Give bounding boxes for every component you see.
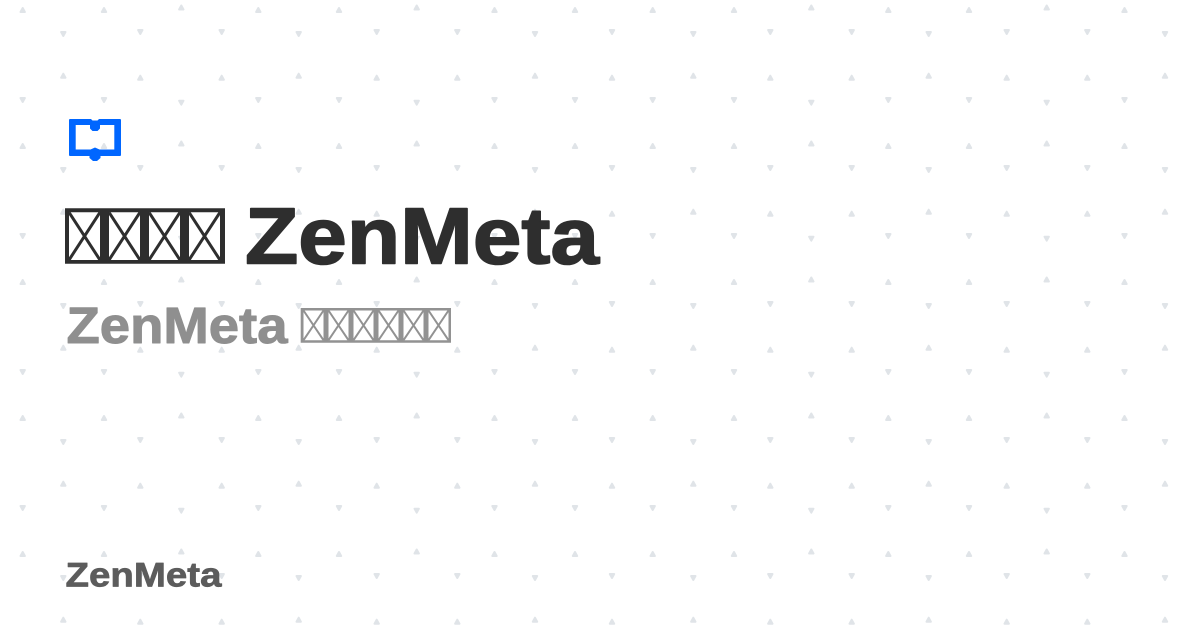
subtitle: brand name: ZenMeta xyxy=(66,297,288,354)
title: missing-glyph boxes xyxy=(65,208,225,264)
footer brand name: ZenMeta xyxy=(66,556,222,594)
subtitle: missing-glyph boxes xyxy=(301,308,451,343)
subtitle xyxy=(66,297,451,354)
icon: blue open book xyxy=(69,119,121,161)
title xyxy=(65,191,600,280)
title: brand name: ZenMeta xyxy=(245,191,600,280)
